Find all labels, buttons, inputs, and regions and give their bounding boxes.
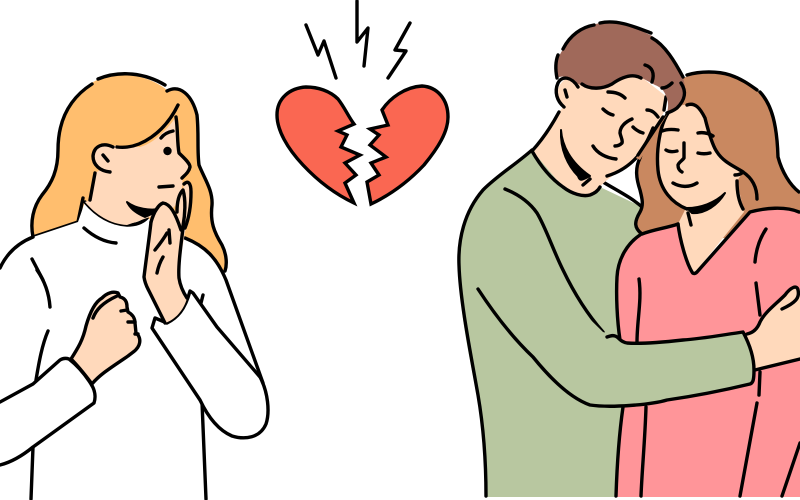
icon: lightning bolt right [388, 23, 410, 78]
man: face and neck [532, 76, 668, 196]
man: embracing green arm [478, 270, 754, 406]
heart: left half [277, 87, 360, 203]
figure: woman in pink [616, 72, 800, 497]
icon: broken heart [277, 1, 448, 204]
icon: lightning bolt left [306, 25, 336, 78]
woman in pink: auburn hair [636, 72, 800, 240]
figure: man head and embracing arm [478, 22, 800, 406]
man: hand on shoulder [745, 287, 800, 370]
figure: worried woman on the left [0, 74, 268, 500]
woman: hand on chin [143, 182, 192, 323]
man: green sweater torso [459, 150, 650, 497]
figure: man hugging [459, 150, 650, 497]
man: brown hair [556, 22, 685, 113]
woman: white sweater body [0, 202, 268, 500]
woman: long orange hair [32, 74, 226, 272]
woman in pink: face and neck [657, 104, 757, 274]
woman: clenched fist [71, 292, 140, 384]
woman: left sleeve [0, 358, 95, 465]
woman in pink: pink shirt [616, 208, 800, 497]
woman: head and neck [85, 105, 190, 225]
icon: lightning bolt middle [357, 1, 368, 66]
heart: right half [367, 86, 448, 204]
woman: raised sleeve [152, 291, 268, 438]
